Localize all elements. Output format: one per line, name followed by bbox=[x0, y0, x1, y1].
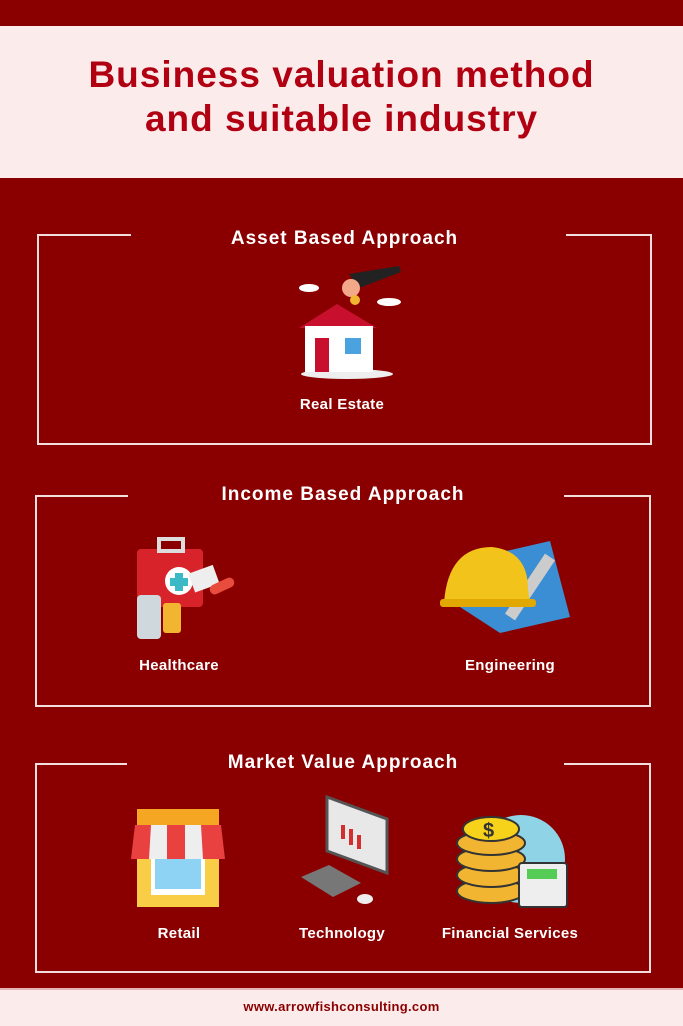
icon: financial: $ bbox=[483, 820, 494, 842]
label: financial services: Financial Services bbox=[442, 925, 578, 942]
icon: engineering bbox=[440, 541, 570, 633]
label: real estate: Real Estate bbox=[300, 396, 384, 413]
icon: retail bbox=[131, 809, 225, 907]
heading: market: Market Value Approach bbox=[228, 752, 458, 773]
icon: healthcare bbox=[137, 537, 234, 639]
panel: market value bbox=[35, 763, 651, 973]
label: retail: Retail bbox=[158, 925, 200, 942]
panel: asset based bbox=[37, 234, 652, 445]
header band bbox=[0, 26, 683, 178]
icon: financial bbox=[456, 815, 568, 908]
label: technology: Technology bbox=[299, 925, 385, 942]
panel: income based bbox=[35, 495, 651, 707]
icon: technology bbox=[301, 795, 388, 904]
title bbox=[88, 54, 595, 139]
heading: income: Income Based Approach bbox=[221, 484, 465, 505]
footer url: www.arrowfishconsulting.com bbox=[243, 999, 440, 1014]
footer bbox=[0, 988, 683, 1026]
icon: house bbox=[299, 266, 401, 379]
label: engineering: Engineering bbox=[465, 657, 555, 674]
heading: asset: Asset Based Approach bbox=[231, 228, 458, 249]
title: and suitable industry bbox=[145, 98, 538, 139]
title: Business valuation method bbox=[88, 54, 595, 95]
label: healthcare: Healthcare bbox=[139, 657, 219, 674]
